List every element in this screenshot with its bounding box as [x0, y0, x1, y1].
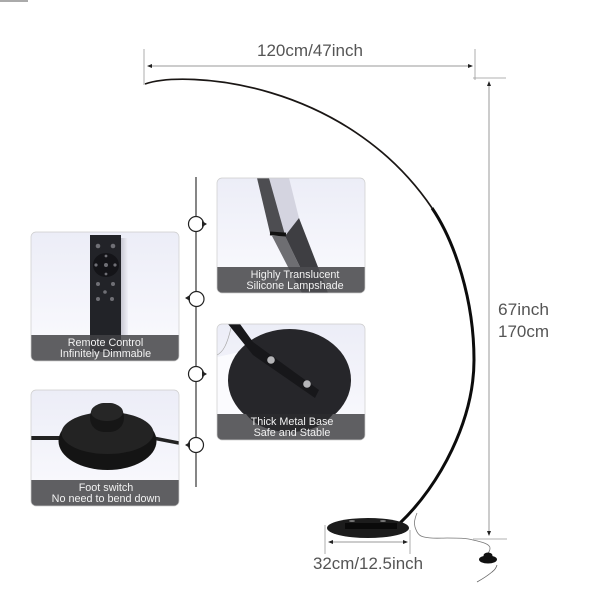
caption: lampshade: Highly Translucent: [251, 269, 339, 281]
caption: foot switch: No need to bend down: [52, 493, 160, 505]
dimension: width 120cm/47inch: [144, 41, 475, 85]
caption: remote control: Remote Control: [68, 337, 143, 349]
dimension: height 67inch 170cm: 170cm: [498, 322, 549, 341]
caption: foot switch: Foot switch: [79, 482, 133, 494]
caption: metal base: Thick Metal Base: [251, 416, 333, 428]
panel: metal base: [217, 324, 365, 440]
floor lamp arc: [145, 79, 474, 523]
panel: lampshade: [217, 178, 365, 293]
dimension: width 120cm/47inch: 120cm/47inch: [257, 41, 363, 60]
power cord and foot switch: [414, 513, 497, 582]
caption: metal base: Safe and Stable: [254, 427, 330, 439]
lamp base: [327, 518, 409, 538]
dimension: height 67inch 170cm: 67inch: [498, 300, 549, 319]
caption: remote control: Infinitely Dimmable: [60, 348, 151, 360]
dimension: base 32cm/12.5inch: [313, 525, 423, 573]
dimension: height 67inch 170cm: [473, 78, 549, 539]
dimension: base 32cm/12.5inch: 32cm/12.5inch: [313, 554, 423, 573]
panel: foot switch: [31, 390, 179, 506]
timeline with callout nodes: [185, 177, 207, 487]
top-left cropped text remnant: [0, 0, 28, 2]
caption: lampshade: Silicone Lampshade: [246, 280, 344, 292]
panel: remote control: [31, 232, 179, 361]
